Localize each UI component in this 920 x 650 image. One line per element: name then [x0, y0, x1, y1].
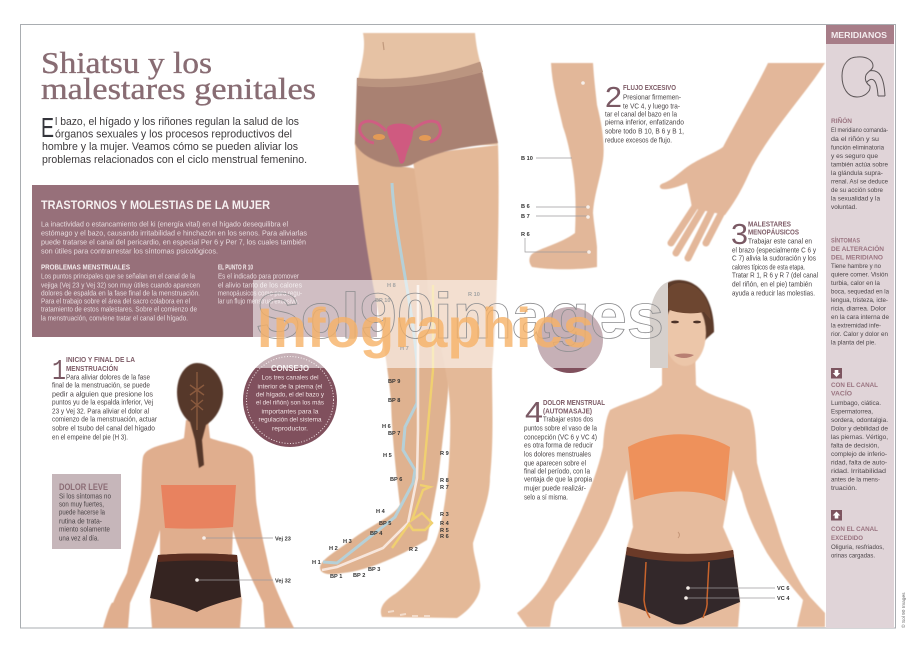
point: Vej 32: [195, 578, 291, 584]
meridian point labels: R 7: [440, 485, 449, 491]
section 4: dolor menstrual: es otra forma de reducir: [524, 440, 593, 450]
section 2: flujo excesivo: Presionar firmemen-: [623, 92, 681, 102]
callout: dolor leve: [52, 474, 121, 549]
meridian point labels: H 7: [400, 346, 409, 352]
text: síntomas: boca, sequedad en la: [831, 288, 889, 296]
text: con el canal vacío: VACÍO: [831, 388, 852, 398]
sidebar header: [826, 25, 894, 44]
section 4: dolor menstrual: (AUTOMASAJE): [543, 406, 593, 416]
point: B 6: [521, 204, 590, 210]
shorts: [355, 62, 498, 167]
hidden faded circle: [537, 307, 603, 373]
text: riñón: función eliminatoria: [831, 144, 884, 152]
waistband: [158, 554, 238, 562]
section 4: dolor menstrual: ventaja de que la propia: [524, 474, 593, 484]
column: el punto R 10: el alivio tanto de los calores: [218, 282, 302, 290]
text: con el canal excedido: [831, 526, 884, 560]
text: síntomas: la planta del pie.: [831, 340, 876, 346]
meridian point labels: BP 10: [375, 298, 390, 304]
meridian point labels: H 3: [343, 539, 352, 545]
waistband: [357, 62, 483, 87]
braid highlights: [190, 372, 204, 430]
watermark band: [253, 280, 668, 368]
callout: consejo: reproductor.: [272, 426, 308, 432]
section 1: inicio y final: 1: [52, 355, 66, 388]
upper leg point: [581, 81, 585, 85]
text: síntomas: lengua, tristeza, icte-: [831, 297, 888, 304]
meridian point labels: BP 8: [388, 398, 400, 404]
section 3: malestares menopáusicos: del riñón, en el pie) también: [732, 280, 812, 288]
column: problemas menstruales: tratamiento de estos malestares. Sobre el comienzo de: [41, 306, 197, 314]
section 1: inicio y final: en el empeine del pie (H 3).: [52, 432, 128, 442]
section 1: inicio y final: MENSTRUACIÓN: [66, 364, 118, 373]
section 3: malestares menopáusicos: el brazo (especialmente C 6 y: [732, 246, 816, 254]
section 3: malestares menopáusicos: C 7) alivia la sudoración y los: [732, 254, 816, 262]
meridian point labels: R 4: [440, 521, 450, 527]
meridian point labels: R 10: [468, 292, 480, 298]
section 3: malestares menopáusicos: calores típicos de esta etapa.: [732, 262, 805, 272]
watermark text: Sol90images: [256, 280, 664, 352]
section 1: inicio y final: pedir a alguien que presione los: [52, 390, 153, 398]
text: síntomas: en la cara interna de: [831, 314, 889, 321]
meridian point labels: R 2: [409, 547, 418, 553]
text: con el canal excedido: orinas cargadas.: [831, 552, 875, 560]
panel intro text: puede tratarse el canal del pericardio, en especial Per 6 y Per 7, los cuales también: [41, 238, 306, 246]
text: con el canal vacío: complejo de inferio-: [831, 451, 887, 458]
hair: [177, 363, 223, 468]
figure: woman's back: [103, 363, 294, 628]
meridian point labels: [312, 283, 480, 580]
panel intro text: La inactividad o estancamiento del ki (energía vital) en el hígado desequilibra el: [41, 220, 288, 228]
callout: dolor leve: DOLOR LEVE: [59, 482, 108, 492]
text: síntomas: la extremidad infe-: [831, 322, 881, 330]
meridian point labels: BP 7: [388, 431, 400, 437]
panel: trastornos y molestias: [32, 185, 377, 337]
section 3: malestares menopáusicos: Trabajar este canal en: [748, 236, 812, 246]
intro text: hombre y la mujer. Veamos cómo se pueden aliviar los: [42, 141, 298, 153]
text: síntomas: turbia, calor en la: [831, 280, 880, 287]
point: B 10: B 10: [521, 156, 533, 162]
near leg: [381, 145, 499, 618]
hair back: [650, 280, 714, 340]
column: problemas menstruales: PROBLEMAS MENSTRUALES: [41, 264, 130, 272]
section 2: flujo excesivo: 2: [605, 82, 622, 114]
section 3: malestares menopáusicos: MALESTARES: [748, 220, 791, 228]
column: problemas menstruales: vejiga (Vej 23 y Vej 32) son muy útiles cuando aparecen: [41, 282, 200, 290]
text: con el canal vacío: antes de la mens-: [831, 476, 880, 484]
hips: [355, 33, 498, 145]
arm and palm: [660, 63, 825, 215]
meridian: spleen: [322, 285, 418, 570]
meridian point labels: BP 1: [330, 574, 342, 580]
body: [517, 350, 825, 627]
face: [664, 300, 706, 366]
section 4: dolor menstrual: mujer puede realizár-: [524, 484, 586, 492]
meridian point labels: H 5: [383, 453, 392, 459]
text: con el canal vacío: CON EL CANAL: [831, 382, 878, 389]
point: R 6: [521, 232, 591, 254]
point: VC 4: [684, 596, 790, 602]
section 3: malestares menopáusicos: MENOPÁUSICOS: [748, 228, 799, 236]
text: riñón: la glándula supra-: [831, 170, 883, 177]
icon: arrow down: [831, 368, 842, 378]
intro text: problemas relacionados con el ciclo menstrual femenino.: [42, 154, 307, 166]
callout: consejo: [243, 353, 337, 447]
text: síntomas: DEL MERIDIANO: [831, 254, 883, 262]
text: riñón: [831, 116, 888, 211]
watermark text: Infographics: [257, 296, 594, 359]
text: con el canal vacío: ridad. Irritabilidad: [831, 468, 886, 475]
point: VC 6: [686, 586, 789, 592]
eyes and mouth: [671, 321, 701, 358]
callout: consejo: Los tres canales del: [262, 374, 319, 382]
text: riñón: también actúa sobre: [831, 162, 888, 168]
title: [41, 45, 316, 106]
panel heading: TRASTORNOS Y MOLESTIAS DE LA MUJER: [41, 200, 271, 212]
waistband: [626, 547, 734, 562]
text: con el canal vacío: [831, 382, 888, 492]
figure: woman's front: [517, 280, 825, 627]
point: B 7: B 7: [521, 214, 530, 220]
text: con el canal vacío: truación.: [831, 485, 857, 492]
text: con el canal vacío: Lumbago, ciática.: [831, 400, 881, 407]
uterus: [360, 121, 440, 164]
section 3: malestares menopáusicos: ayuda a reducir las molestias.: [732, 288, 815, 298]
text: síntomas: [831, 236, 889, 346]
meridian point labels: BP 4: [370, 531, 383, 537]
point: B 10: [521, 156, 572, 162]
callout: dolor leve: puede hacerse la: [59, 508, 106, 516]
section 2: flujo excesivo: [605, 82, 684, 144]
figure: center legs with meridians: [312, 33, 499, 618]
bangs: [663, 283, 711, 320]
callout: dolor leve: rutina de trata-: [59, 516, 102, 526]
section 4: dolor menstrual: concepción (VC 6 y VC 4): [524, 432, 597, 442]
text: con el canal excedido: Oliguria, resfriados,: [831, 544, 884, 551]
section 1: inicio y final: [52, 355, 157, 442]
meridian point labels: R 9: [440, 451, 449, 457]
section 4: dolor menstrual: 4: [525, 397, 543, 429]
section 1: inicio y final: final de la menstruación, se puede: [52, 380, 150, 390]
meridian point labels: H 4: [376, 509, 386, 515]
point: B 7: [521, 214, 590, 220]
point: Vej 23: [202, 536, 291, 542]
section 4: dolor menstrual: los dolores menstruales: [524, 450, 591, 458]
text: riñón: de su acción sobre: [831, 187, 883, 194]
section 1: inicio y final: 23 y Vej 32. Para aliviar el dolor al: [52, 406, 149, 416]
column: el punto R 10: menopáusicos como para regu-: [218, 290, 303, 298]
point: R 6: R 6: [521, 232, 530, 238]
text: con el canal vacío: ridad, falta de auto-: [831, 460, 887, 466]
callout: consejo: interior de la pierna (el: [258, 384, 323, 390]
meridian point labels: BP 2: [353, 573, 365, 579]
section 4: dolor menstrual: selo a sí misma.: [524, 492, 568, 502]
text: con el canal vacío: Dolor y debilidad de: [831, 426, 888, 432]
panel intro text: estómago y el bazo, causando irritabilidad e hinchazón en los senos. Para aliviarlas: [41, 228, 307, 238]
text: síntomas: rior. Calor y dolor en: [831, 331, 888, 338]
section 4: dolor menstrual: [524, 397, 606, 502]
column: el punto R 10: EL PUNTO R 10: [218, 264, 253, 272]
intro text: órganos sexuales y los procesos reproductivos del: [55, 128, 292, 140]
meridian: liver: [323, 183, 417, 563]
navel: [678, 532, 680, 538]
figure: arm and hand: [660, 63, 825, 258]
text: síntomas: SÍNTOMAS: [831, 236, 860, 244]
column: problemas menstruales: dolores de espalda en la fase final de la menstruación.: [41, 290, 200, 298]
orange stripes: [644, 562, 709, 618]
column: problemas menstruales: Para el trabajo sobre el área del sacro colabora en el: [41, 298, 190, 306]
figure: side leg: [521, 63, 604, 269]
intro text: E: [41, 112, 54, 143]
section 1: inicio y final: sobre el tsubo del canal del hígado: [52, 424, 155, 432]
far leg: [320, 143, 450, 574]
point: VC 4: VC 4: [777, 596, 790, 602]
section 4: dolor menstrual: Trabajar estos dos: [543, 414, 593, 424]
section 2: flujo excesivo: FLUJO EXCESIVO: [623, 83, 676, 92]
fingers: [671, 205, 722, 258]
column: el punto R 10: Es el indicado para promover: [218, 274, 300, 280]
faded head overlay: [650, 282, 668, 368]
shorts: [150, 554, 241, 612]
callout: dolor leve: son muy fuertes,: [59, 500, 104, 508]
meridian point labels: BP 3: [368, 567, 380, 573]
section 1: inicio y final: INICIO Y FINAL DE LA: [66, 355, 135, 364]
credit: © Sol 90 Images: [900, 592, 907, 628]
toes: [388, 611, 430, 616]
callout: dolor leve: miento solamente: [59, 524, 110, 534]
column: problemas menstruales: Los puntos principales que se señalan en el canal de la: [41, 274, 195, 280]
section 3: malestares menopáusicos: Tratar R 1, R 6 y R 7 (del canal: [732, 270, 818, 280]
section 1: inicio y final: Para aliviar dolores de la fase: [66, 372, 150, 382]
text: riñón: y es seguro que: [831, 153, 878, 160]
text: con el canal vacío: las piernas. Vértigo,: [831, 434, 888, 441]
callout: consejo: del hígado, el del bazo y: [256, 392, 325, 398]
text: con el canal excedido: EXCEDIDO: [831, 535, 863, 542]
meridian point labels: BP 6: [390, 477, 402, 483]
navel: [383, 42, 384, 50]
text: síntomas: quiere comer. Visión: [831, 272, 888, 278]
title: Shiatsu y los: [41, 45, 212, 80]
text: riñón: rrenal. Así se deduce: [831, 178, 888, 186]
shorts: [618, 547, 740, 624]
section 4: dolor menstrual: que aparecen sobre el: [524, 458, 586, 468]
title: malestares genitales: [41, 71, 316, 106]
text: con el canal vacío: Espermatorrea,: [831, 408, 873, 416]
callout: consejo: importantes para la: [262, 408, 319, 416]
text: con el canal vacío: sordera, odontalgia.: [831, 417, 888, 424]
callout: dolor leve: una vez al día.: [59, 534, 99, 542]
bandeau top: [628, 434, 730, 501]
bandeau top: [161, 485, 236, 529]
meridian point labels: R 8: [440, 478, 449, 484]
point: Vej 23: Vej 23: [275, 536, 291, 542]
section 2: flujo excesivo: sobre todo B 10, B 6 y B 1,: [605, 126, 684, 136]
callout: consejo: regulación del sistema: [258, 416, 322, 424]
meridian point labels: R 6: [440, 534, 449, 540]
text: riñón: la sexualidad y la: [831, 196, 880, 202]
text: síntomas: DE ALTERACIÓN: [831, 244, 884, 253]
text: riñón: voluntad.: [831, 204, 857, 211]
section 3: malestares menopáusicos: [731, 219, 818, 298]
back skin: [103, 420, 294, 628]
section 1: inicio y final: puntos yu de la espalda inferior, Vej: [52, 398, 153, 406]
section 3: malestares menopáusicos: 3: [731, 219, 748, 251]
text: síntomas: ricia, diarrea. Dolor: [831, 306, 887, 312]
section 2: flujo excesivo: te VC 4, y luego tra-: [623, 102, 680, 110]
meridian point labels: H 2: [329, 546, 338, 552]
text: riñón: RIÑÓN: [831, 116, 852, 125]
callout: consejo: el del riñón) son los más: [256, 400, 325, 406]
meridian point labels: H 6: [382, 424, 391, 430]
point: Vej 32: Vej 32: [275, 578, 291, 584]
section 1: inicio y final: comienzo de la menstruación, actuar: [52, 414, 157, 424]
section 4: dolor menstrual: DOLOR MENSTRUAL: [543, 398, 606, 407]
panel intro text: [41, 220, 307, 256]
section 2: flujo excesivo: pierna inferior, enfatizando: [605, 118, 684, 126]
text: síntomas: Tiene hambre y no: [831, 263, 881, 270]
point: VC 6: VC 6: [777, 586, 789, 592]
column: problemas menstruales: [41, 264, 200, 322]
panel intro text: son útiles para contrarrestar los síntomas psicológicos.: [41, 246, 218, 256]
text: con el canal vacío: falta de decisión,: [831, 442, 879, 450]
icon: arrow up: [831, 510, 842, 520]
intro text: l bazo, el hígado y los riñones regulan la salud de los: [55, 116, 299, 128]
meridian point labels: H 8: [387, 283, 396, 289]
column: el punto R 10: lar un flujo menstrual excesivo.: [218, 298, 299, 306]
text: riñón: El meridiano comanda-: [831, 127, 888, 134]
sidebar: meridianos: [826, 25, 894, 628]
text: con el canal excedido: CON EL CANAL: [831, 526, 878, 533]
column: el punto R 10: [218, 264, 303, 306]
meridian point labels: BP 9: [388, 379, 400, 385]
callout: consejo: CONSEJO: [271, 363, 309, 373]
point: B 6: B 6: [521, 204, 530, 210]
section 2: flujo excesivo: reduce excesos de flujo.: [605, 136, 672, 144]
icon: kidney: [842, 57, 885, 97]
column: problemas menstruales: la menstruación, conviene tratar el canal del hígado.: [41, 316, 188, 322]
text: riñón: da el riñón y su: [831, 136, 879, 143]
sidebar header: MERIDIANOS: [831, 31, 888, 40]
section 2: flujo excesivo: tar el canal del bazo en la: [605, 110, 678, 118]
intro text: [41, 112, 307, 166]
section 4: dolor menstrual: final del período, con la: [524, 466, 591, 476]
meridian: kidney: [392, 285, 433, 548]
meridian point labels: R 3: [440, 512, 449, 518]
section 4: dolor menstrual: puntos sobre el vaso de la: [524, 424, 598, 432]
meridian point labels: R 5: [440, 528, 449, 534]
meridian point labels: H 1: [312, 560, 321, 566]
callout: dolor leve: Si los síntomas no: [59, 492, 111, 500]
meridian point labels: BP 5: [379, 521, 391, 527]
